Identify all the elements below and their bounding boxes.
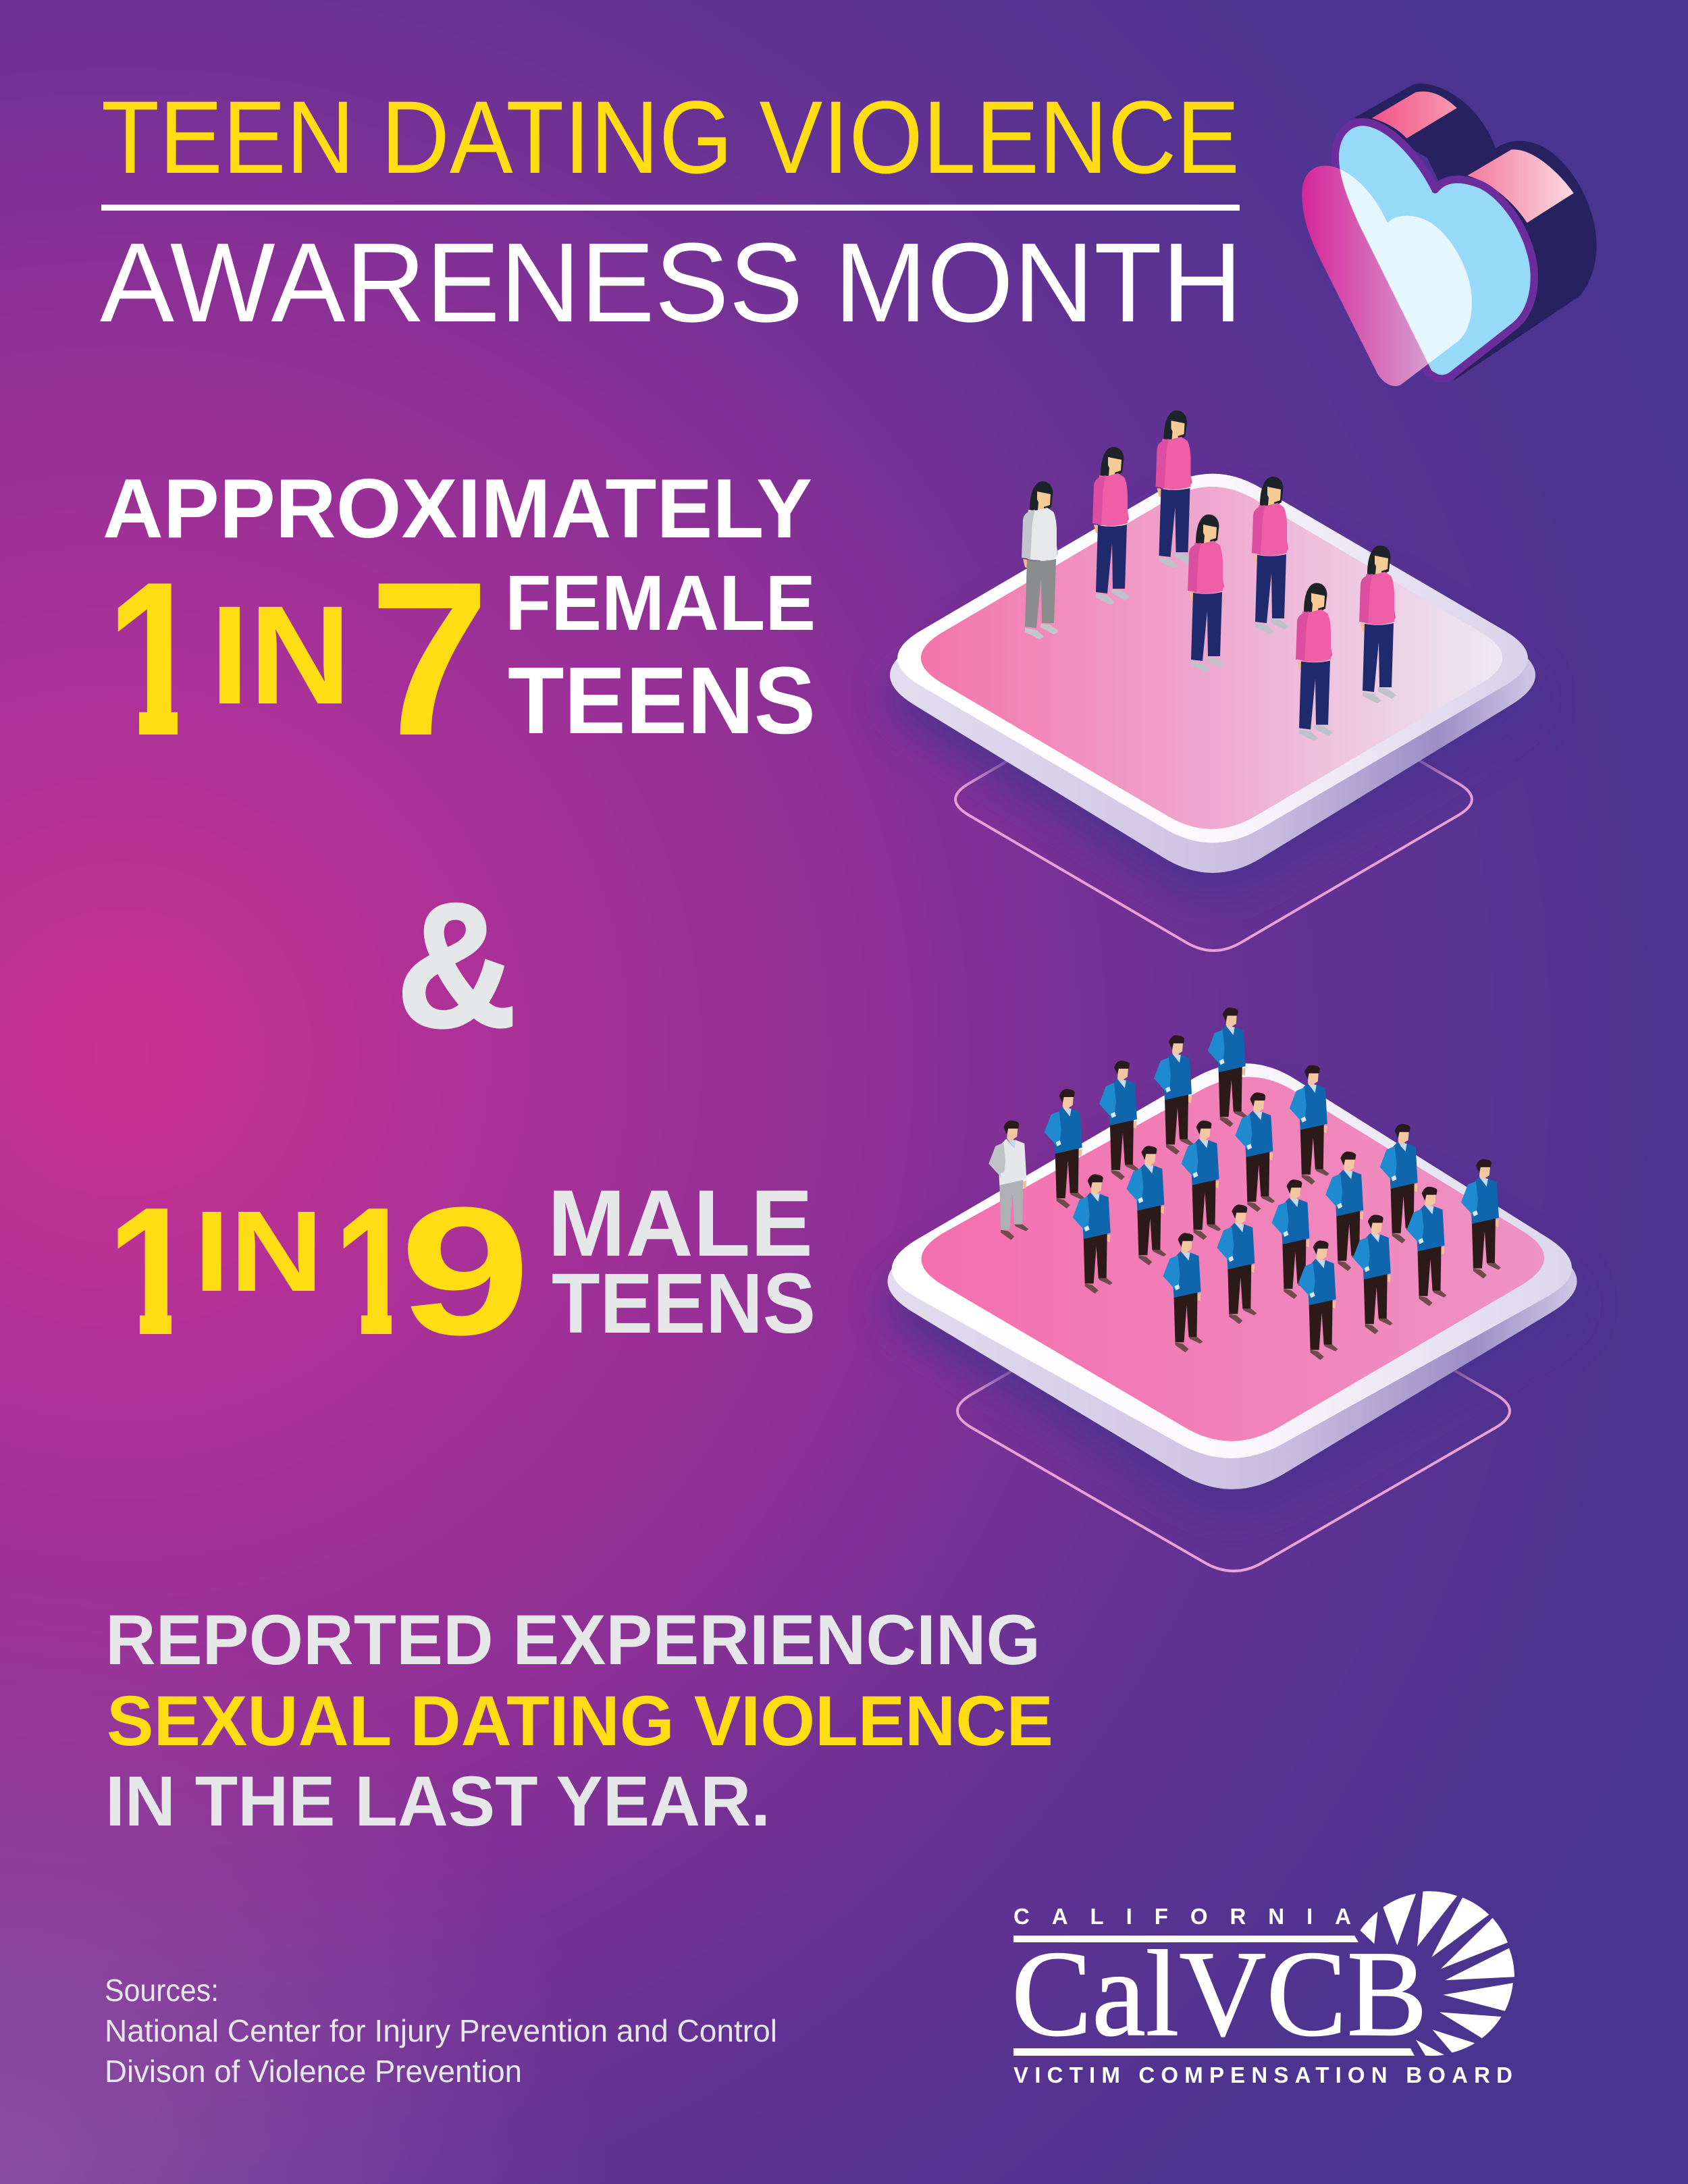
- women figures: [1022, 410, 1396, 741]
- woman: [1092, 447, 1130, 605]
- man: [1380, 1124, 1420, 1244]
- platform with 7 women: [890, 410, 1535, 951]
- title line 2: AWARENESS MONTH: [100, 220, 1242, 346]
- platform shadow: [887, 1097, 1577, 1513]
- text: approximately: APPROXIMATELY: [103, 462, 812, 556]
- number: 1: 1: [107, 1170, 198, 1373]
- text: IN: IN: [210, 577, 351, 734]
- man: [1099, 1061, 1139, 1180]
- number: 1: 1: [106, 536, 204, 781]
- logo: California: CALIFORNIA: [1013, 1904, 1351, 1929]
- title: [100, 80, 1242, 346]
- man: [1073, 1174, 1113, 1294]
- platform shadow: [890, 501, 1535, 897]
- sources: [105, 1973, 777, 2089]
- source line 2: Divison of Violence Prevention: [105, 2054, 522, 2089]
- number: 19: 9: [400, 1170, 531, 1373]
- woman: [1188, 514, 1225, 672]
- logo: CalVCB: [1011, 1891, 1514, 2087]
- platform rim: [897, 474, 1528, 843]
- logo: bottom rule: [1013, 2048, 1415, 2056]
- platform side: [887, 1073, 1577, 1489]
- man: [1461, 1159, 1501, 1279]
- man: [1235, 1092, 1275, 1212]
- man: [1271, 1179, 1311, 1299]
- line 3: IN THE LAST YEAR.: [105, 1762, 770, 1841]
- number: 7: 7: [369, 536, 490, 781]
- outline under platform: [955, 648, 1472, 951]
- man: [1154, 1035, 1194, 1154]
- man: [1290, 1065, 1329, 1185]
- statement text: [105, 1601, 1053, 1841]
- statistic: 1 in 19 male teens: [117, 1191, 813, 1336]
- number: 19: [343, 1207, 523, 1336]
- man: [1407, 1187, 1446, 1306]
- man: [1163, 1233, 1203, 1352]
- line 1: REPORTED EXPERIENCING: [105, 1601, 1040, 1680]
- man: [1045, 1089, 1084, 1208]
- woman: [1156, 410, 1192, 568]
- ampersand: &: [396, 866, 517, 1064]
- statistic: approximately 1 in 7 female teens: [105, 478, 813, 735]
- number: 19: 1: [334, 1170, 415, 1373]
- icon: 3D heart: [1302, 84, 1596, 386]
- man: [1208, 1007, 1248, 1127]
- man: [1353, 1215, 1393, 1334]
- outline under platform: [957, 1251, 1510, 1571]
- man in grey: [988, 1121, 1028, 1240]
- logo: sun rays: [1360, 1891, 1514, 2056]
- man: [1182, 1121, 1221, 1240]
- man: [1325, 1152, 1365, 1271]
- text: teens: TEENS: [552, 1256, 816, 1351]
- sources label: Sources:: [105, 1973, 219, 2008]
- woman: [1296, 583, 1333, 741]
- line 2: SEXUAL DATING VIOLENCE: [107, 1682, 1053, 1761]
- platform top: [922, 1077, 1544, 1441]
- man: [1126, 1146, 1166, 1265]
- source line 1: National Center for Injury Prevention and Control: [105, 2013, 777, 2048]
- platform with 19 men: [887, 1007, 1577, 1571]
- logo: top rule: [1013, 1936, 1359, 1942]
- woman in grey: [1022, 481, 1059, 639]
- platform rim: [892, 1063, 1572, 1458]
- text: IN: IN: [194, 1188, 323, 1316]
- woman: [1359, 545, 1396, 703]
- text: female: FEMALE: [505, 559, 816, 647]
- woman: [1252, 477, 1289, 635]
- text: male: MALE: [548, 1170, 813, 1276]
- men figures: [988, 1007, 1501, 1360]
- logo: wordmark: CalVCB: [1011, 1926, 1427, 2062]
- man: [1217, 1204, 1257, 1324]
- platform side: [890, 477, 1535, 873]
- title divider: [101, 205, 1240, 211]
- logo: Victim Compensation Board: VICTIM COMPENSATION BOARD: [1013, 2062, 1512, 2087]
- title line 1: TEEN DATING VIOLENCE: [101, 80, 1240, 195]
- platform top: [921, 487, 1502, 829]
- man: [1298, 1241, 1338, 1360]
- text: teens: TEENS: [508, 647, 816, 753]
